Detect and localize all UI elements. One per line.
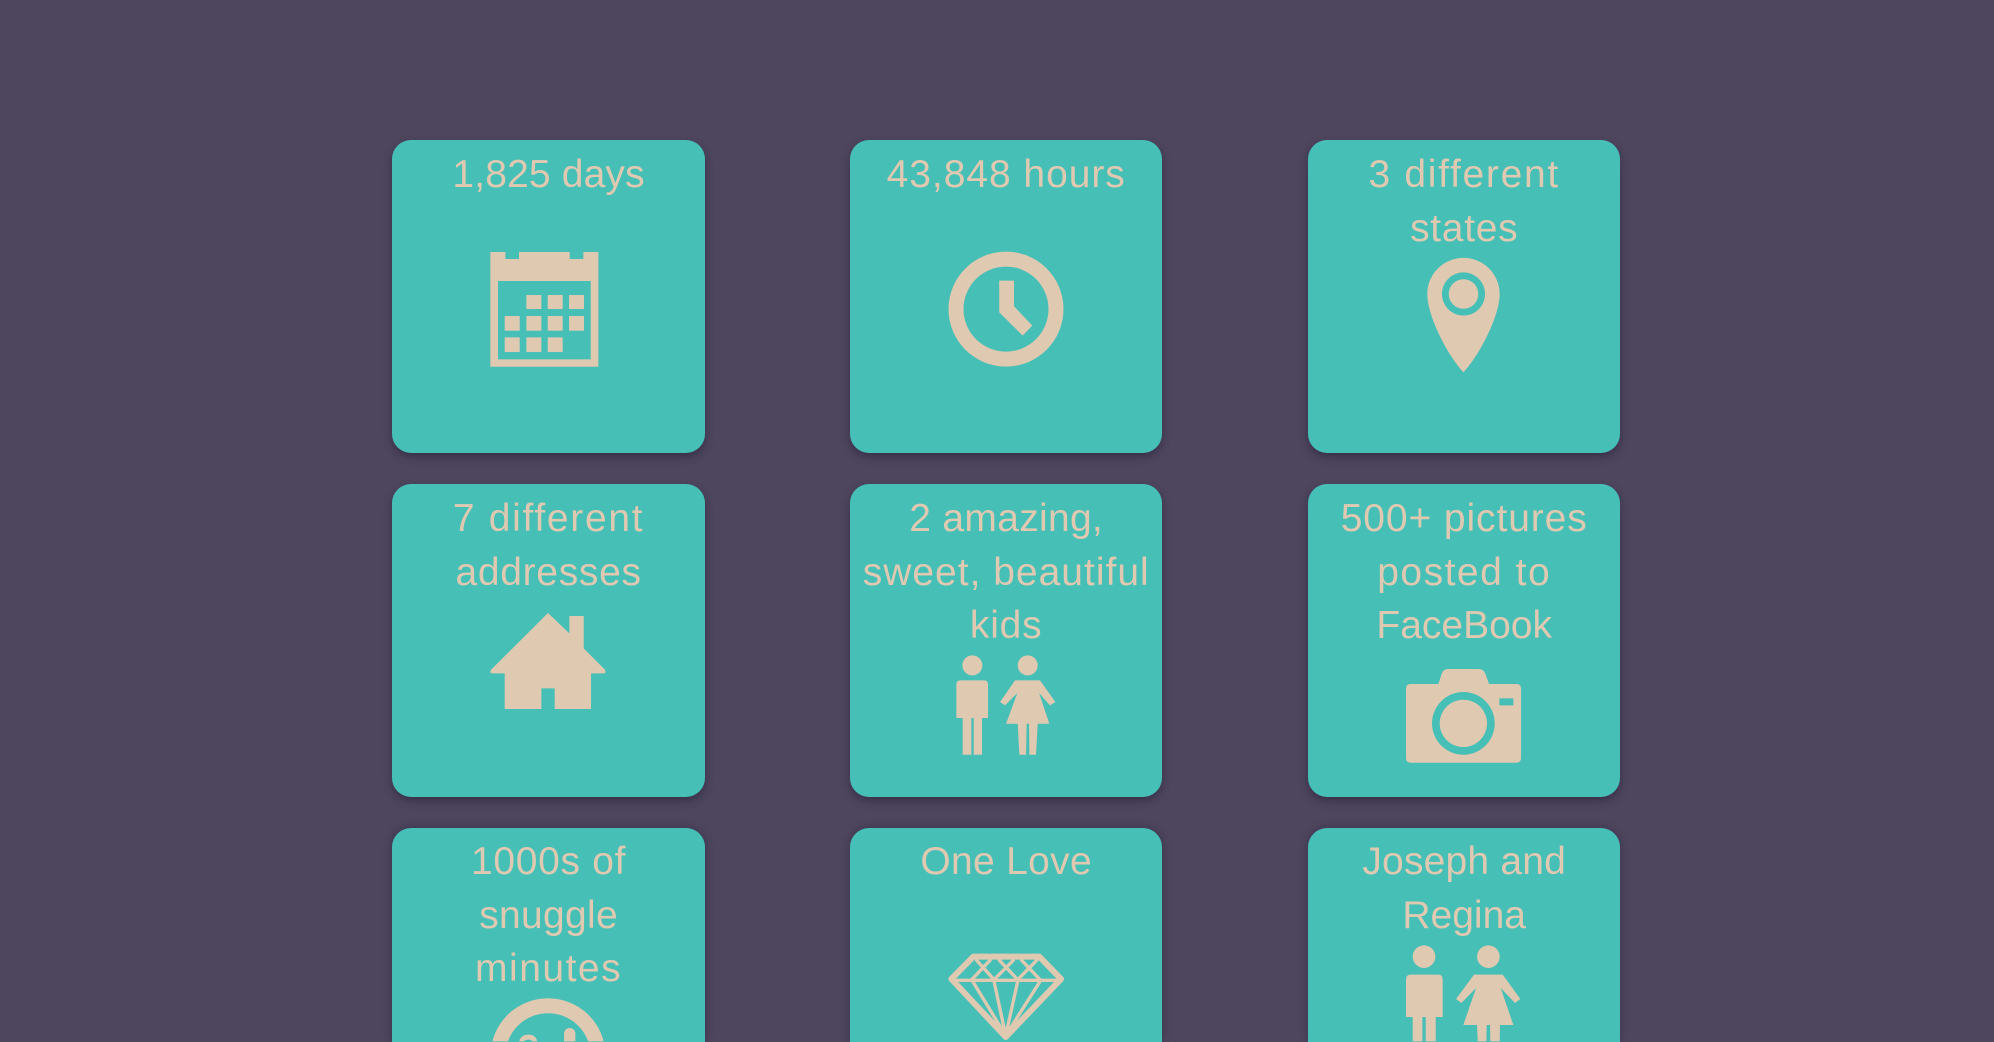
text: 7 different addresses: 7 different [453, 497, 644, 540]
text: 3 different states: states [1410, 207, 1518, 250]
panel: 1,825 days [392, 140, 705, 453]
text: 7 different addresses: addresses [455, 551, 642, 594]
panel: 7 different addresses [392, 484, 705, 797]
panel: Joseph and Regina [1308, 828, 1620, 1042]
text: 1,825 days: 1,825 days [452, 153, 645, 196]
text: 1000s of snuggle minutes [471, 840, 626, 990]
text: 43,848 hours: 43,848 hours [887, 153, 1126, 196]
icon: map pin [1427, 258, 1500, 373]
text: 500+ pictures posted to FaceBook: 500+ pictures [1341, 497, 1588, 540]
text: 7 different addresses [453, 497, 644, 594]
text: 1000s of snuggle minutes: minutes [475, 947, 622, 990]
panel: 43,848 hours [850, 140, 1162, 453]
text: 2 amazing, sweet, beautiful kids [863, 497, 1150, 647]
panel: 500+ pictures posted to FaceBook [1308, 484, 1620, 797]
icon: camera [1406, 669, 1521, 763]
text: 1000s of snuggle minutes: 1000s of [471, 840, 626, 883]
text: Joseph and Regina [1362, 840, 1566, 937]
panel: One Love [850, 828, 1162, 1042]
icon: man and woman [1406, 946, 1520, 1042]
icon: clock [948, 252, 1063, 367]
text: 1000s of snuggle minutes: snuggle [479, 894, 618, 937]
text: Joseph and Regina: Joseph and [1362, 840, 1566, 883]
text: 3 different states [1368, 153, 1560, 250]
text: 2 amazing, sweet, beautiful kids: 2 amazing, [909, 497, 1103, 540]
icon: boy and girl [956, 656, 1055, 755]
icon: house [491, 613, 606, 709]
text: 500+ pictures posted to FaceBook: posted to [1377, 551, 1551, 594]
panel: 1000s of snuggle minutes [392, 828, 705, 1042]
icon: diamond [951, 957, 1061, 1037]
icon: calendar [491, 252, 599, 367]
text: 2 amazing, sweet, beautiful kids: kids [970, 604, 1042, 647]
text: 2 amazing, sweet, beautiful kids: sweet, beautiful [863, 551, 1150, 594]
text: 500+ pictures posted to FaceBook [1341, 497, 1588, 647]
icon: smiley face [493, 999, 604, 1042]
text: 500+ pictures posted to FaceBook: FaceBook [1376, 604, 1552, 647]
panel: 3 different states [1308, 140, 1620, 453]
text: 3 different states: 3 different [1368, 153, 1560, 196]
panel: 2 amazing, sweet, beautiful kids [850, 484, 1162, 797]
text: One Love: One Love [920, 840, 1092, 883]
text: Joseph and Regina: Regina [1402, 894, 1526, 937]
